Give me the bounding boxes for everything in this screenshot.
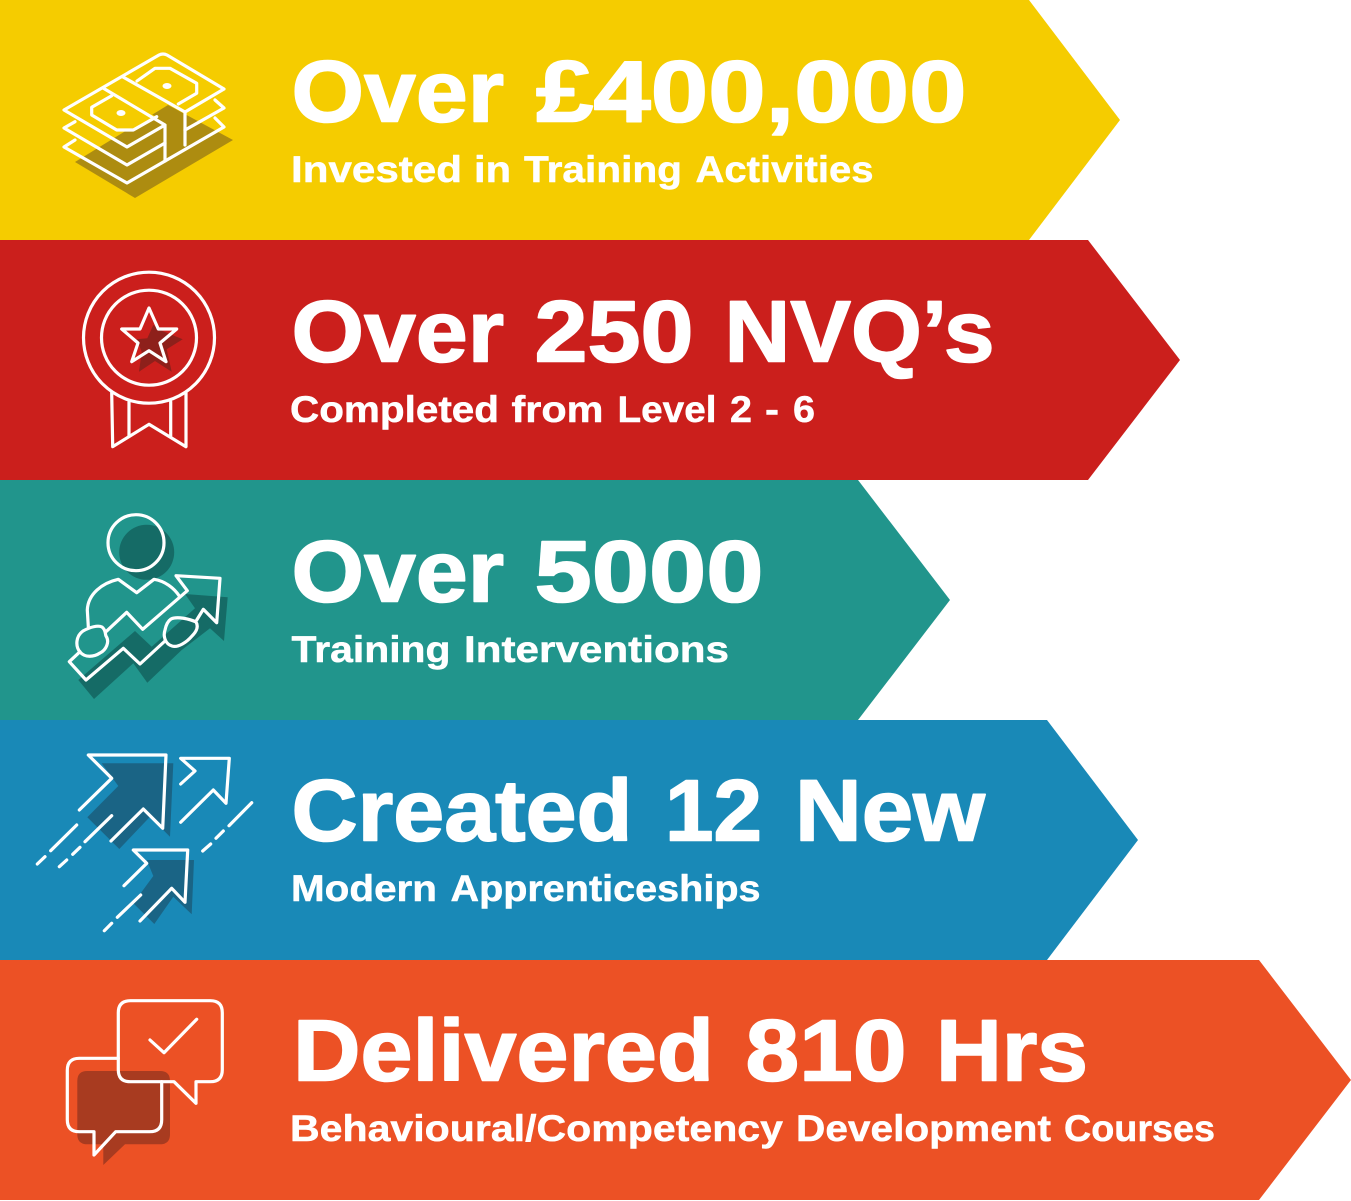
text: invested in training activities: in bbox=[474, 149, 511, 190]
heading: delivered 810 hrs: Delivered bbox=[293, 1002, 714, 1100]
heading: over 400,000: Over bbox=[292, 44, 504, 140]
heading: over 400,000: £400,000 bbox=[536, 44, 966, 140]
heading: over 250 NVQs: Over bbox=[292, 284, 504, 380]
panel: development courses bbox=[0, 960, 1351, 1200]
heading: created 12 new: New bbox=[795, 762, 985, 860]
heading: created 12 new: Created bbox=[292, 762, 632, 860]
heading: over 5000: Over bbox=[292, 524, 504, 620]
text: invested in training activities: Invested bbox=[291, 149, 462, 190]
text: completed from level 2-6: - bbox=[765, 389, 779, 430]
text: behavioural competency development courses: Courses bbox=[1064, 1108, 1215, 1149]
panel: NVQs bbox=[0, 240, 1180, 480]
heading: over 5000: 5000 bbox=[534, 524, 764, 620]
text: modern apprenticeships: Apprenticeships bbox=[450, 868, 760, 909]
heading: over 250 NVQs: 250 bbox=[534, 284, 694, 380]
text: completed from level 2-6: from bbox=[512, 389, 604, 430]
heading: delivered 810 hrs: 810 bbox=[746, 1002, 906, 1100]
text: behavioural competency development courses: Development bbox=[796, 1108, 1051, 1149]
text: behavioural competency development courses: Behavioural/Competency bbox=[290, 1108, 783, 1149]
icon: person holding rising arrow bbox=[69, 515, 228, 699]
text: completed from level 2-6: 6 bbox=[793, 389, 815, 430]
icon: stack of banknotes bbox=[64, 54, 233, 198]
panel: training investment bbox=[0, 0, 1120, 240]
text: completed from level 2-6: Completed bbox=[290, 389, 499, 430]
heading: delivered 810 hrs: Hrs bbox=[936, 1002, 1088, 1100]
heading: created 12 new: 12 bbox=[665, 762, 762, 860]
icon: speech bubbles with check mark bbox=[67, 1001, 222, 1165]
heading: over 250 NVQs: NVQ’s bbox=[724, 284, 994, 380]
icon: award rosette with star bbox=[84, 272, 214, 447]
panel: modern apprenticeships bbox=[0, 720, 1138, 960]
text: modern apprenticeships: Modern bbox=[291, 868, 437, 909]
text: invested in training activities: Activities bbox=[696, 149, 874, 190]
text: completed from level 2-6: Level bbox=[618, 389, 716, 430]
text: invested in training activities: Training bbox=[524, 149, 682, 190]
text: training interventions: Training bbox=[292, 629, 450, 670]
text: completed from level 2-6: 2 bbox=[730, 389, 752, 430]
text: training interventions: Interventions bbox=[464, 629, 729, 670]
icon: three upward arrows with speed lines bbox=[37, 755, 252, 931]
panel: training interventions bbox=[0, 480, 950, 720]
